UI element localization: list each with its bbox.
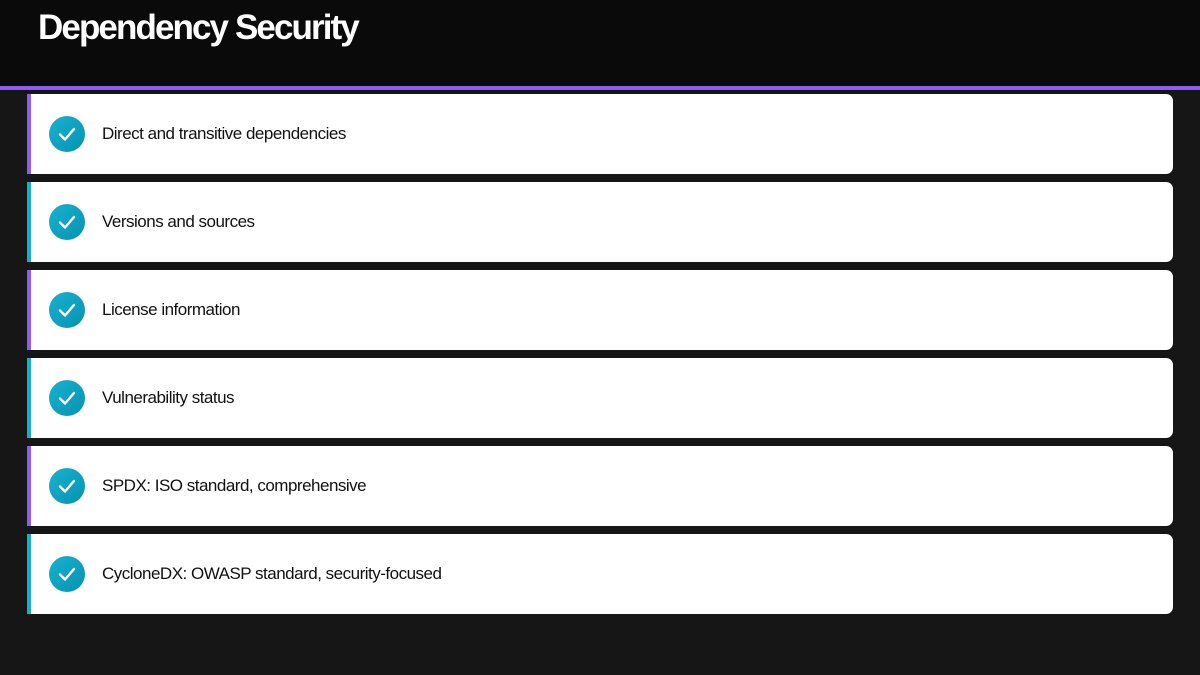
card: CycloneDX <box>27 534 1173 614</box>
card: SPDX <box>27 446 1173 526</box>
card: vulnerability <box>27 358 1173 438</box>
card: license <box>27 270 1173 350</box>
accent rule <box>0 86 1200 90</box>
card: license: License information <box>102 300 240 319</box>
card: direct and transitive: Direct and transitive dependencies <box>102 124 346 143</box>
card: SPDX: SPDX: ISO standard, comprehensive <box>102 476 366 495</box>
card: direct and transitive <box>27 94 1173 174</box>
title: Dependency Security <box>38 8 358 47</box>
card: CycloneDX: CycloneDX: OWASP standard, security-focused <box>102 564 441 583</box>
card: vulnerability: Vulnerability status <box>102 388 234 407</box>
header bar <box>0 0 1200 86</box>
card: versions <box>27 182 1173 262</box>
card: versions: Versions and sources <box>102 212 255 231</box>
